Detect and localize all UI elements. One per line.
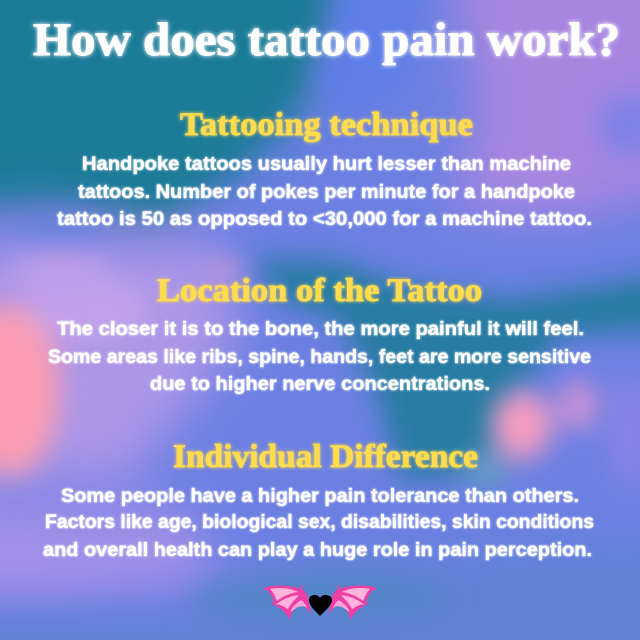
text block: individual difference <box>43 486 594 561</box>
text block: location of the tattoo: due to higher nerve concentrations. <box>150 374 490 395</box>
text block: tattooing technique <box>57 154 592 230</box>
text block: tattooing technique: Handpoke tattoos usually hurt lesser than machine <box>82 154 571 175</box>
text block: individual difference: and overall health can play a huge role in pain perception. <box>43 540 592 561</box>
text block: individual difference: Factors like age, biological sex, disabilities, skin conditions <box>45 512 594 533</box>
text block: location of the tattoo: Some areas like ribs, spine, hands, feet are more sensitive <box>48 347 591 368</box>
section: location of the tattoo <box>48 273 591 395</box>
title: How does tattoo pain work? <box>33 14 620 66</box>
section: individual difference <box>43 439 594 561</box>
heading: tattooing technique: Tattooing technique <box>180 107 473 143</box>
section: tattooing technique <box>57 107 592 230</box>
text block: individual difference: Some people have a higher pain tolerance than others. <box>61 486 579 507</box>
icon: winged black heart <box>263 584 377 620</box>
text block: tattooing technique: tattoos. Number of pokes per minute for a handpoke <box>78 182 575 203</box>
text block: location of the tattoo <box>48 319 591 395</box>
text block: tattooing technique: tattoo is 50 as opposed to <30,000 for a machine tattoo. <box>57 209 592 230</box>
heading: individual difference: Individual Difference <box>173 439 478 475</box>
text block: location of the tattoo: The closer it is to the bone, the more painful it will feel. <box>57 319 584 340</box>
heading: location of the tattoo: Location of the Tattoo <box>157 273 482 309</box>
